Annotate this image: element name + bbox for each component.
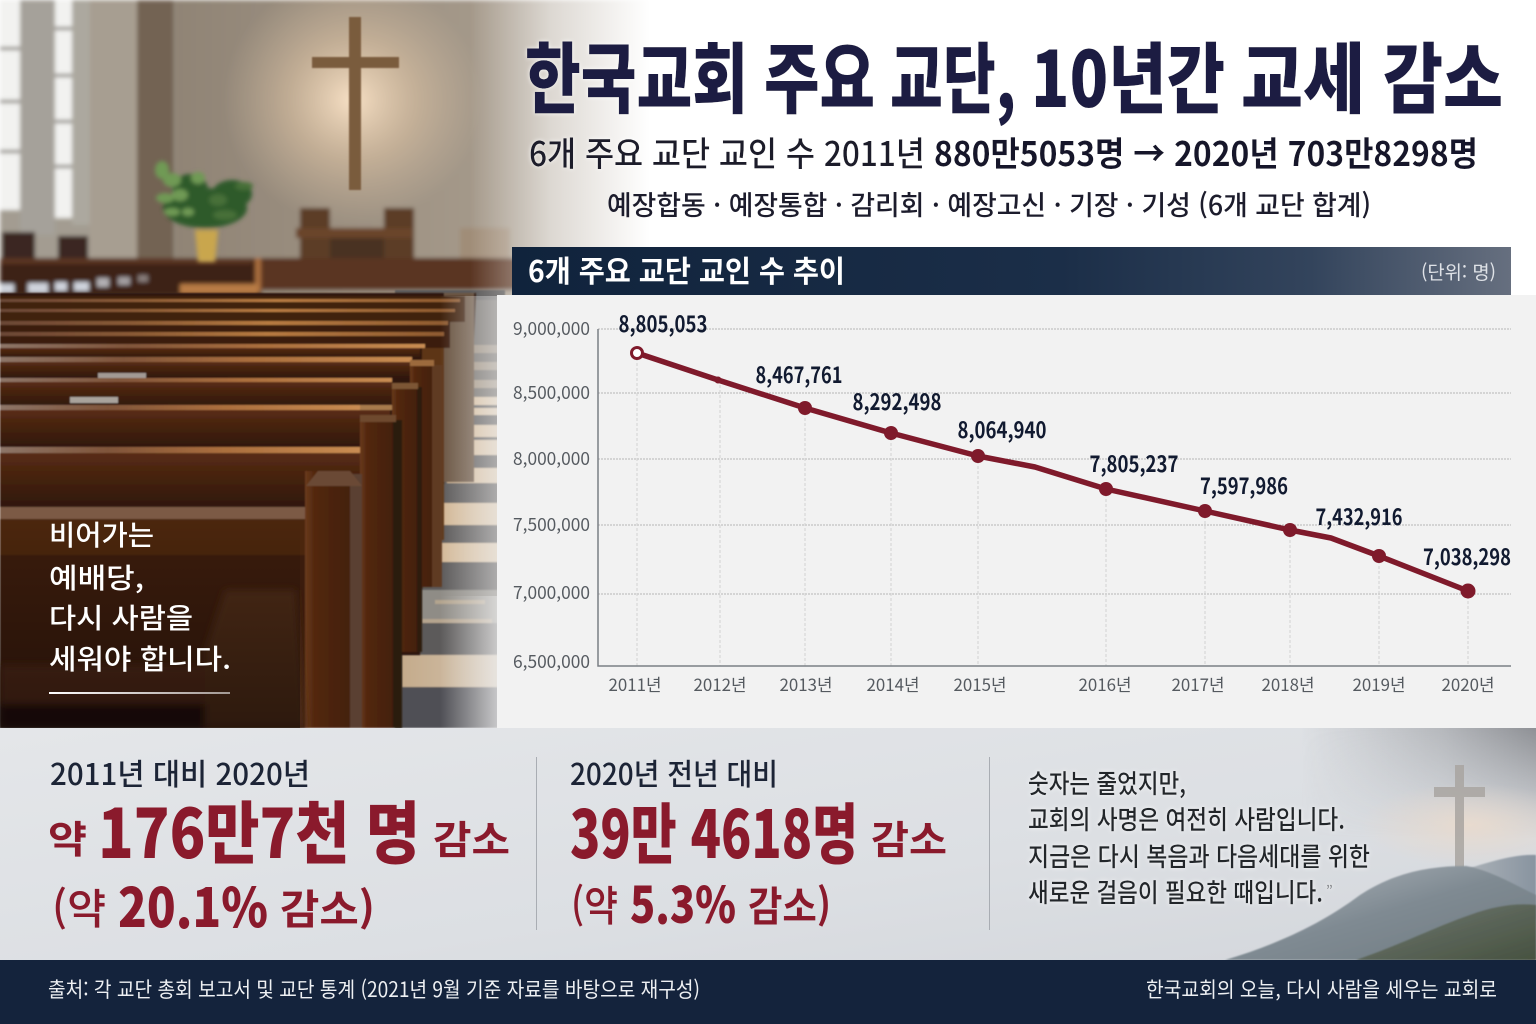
far rows — [0, 296, 465, 322]
books — [98, 373, 146, 378]
stat: 2011 vs 2020: 176만7천 명 — [98, 779, 420, 878]
stat: 2011 vs 2020: 감소) — [280, 876, 375, 936]
x axis labels: 2015년 — [954, 671, 1006, 696]
x axis labels: 2019년 — [1352, 671, 1406, 696]
row — [0, 357, 412, 362]
message text: 교회의 사명은 여전히 사람입니다. — [1028, 800, 1345, 837]
trend line — [637, 353, 1468, 591]
stat: 2011 vs 2020: 감소 — [433, 810, 510, 866]
x axis labels: 2020년 — [1442, 671, 1494, 696]
message text: 지금은 다시 복음과 다음세대를 위한 — [1028, 837, 1370, 874]
footer bar: 한국교회의 오늘, 다시 사람을 세우는 교회로 — [1146, 974, 1497, 1004]
y axis labels: 7,500,000 — [513, 511, 590, 537]
panel: line chart — [497, 247, 1536, 728]
data labels: 8,467,761 — [756, 358, 842, 390]
data labels: 7,805,237 — [1090, 447, 1178, 479]
message text: 숫자는 줄었지만, — [1028, 764, 1186, 801]
data labels: 8,292,498 — [852, 385, 942, 417]
x axis labels: 2013년 — [780, 671, 832, 696]
title: 한국교회 — [525, 19, 748, 130]
panel: bottom stats band — [0, 728, 1536, 960]
message text: 새로운 걸음이 필요한 때입니다. — [1028, 873, 1323, 910]
chart header bar: 6개 주요 교단 교인 수 추이 — [528, 247, 845, 291]
data labels: 8,064,940 — [958, 413, 1046, 445]
data labels: 7,038,298 — [1423, 540, 1511, 572]
floor with sun stripes — [395, 290, 512, 728]
title — [525, 19, 1503, 130]
pews — [0, 293, 476, 728]
y axis labels: 8,000,000 — [513, 445, 590, 471]
stat: 2020 vs previous year: 5.3% — [630, 866, 736, 938]
photo fade into white header — [470, 0, 650, 296]
stat: 2011 vs 2020 — [48, 750, 510, 943]
icon: hilltop cross — [1434, 765, 1485, 868]
photo caption: 비어가는 — [49, 514, 154, 554]
denominations list: 예장합동 · 예장통합 · 감리회 · 예장고신 · 기장 · 기성 (6개 교단 합계) — [607, 184, 1371, 223]
stat: 2020 vs previous year — [570, 750, 947, 938]
chairs — [2, 232, 35, 282]
y axis labels: 7,000,000 — [513, 579, 590, 605]
title: 교단, — [890, 19, 1016, 130]
altar — [300, 208, 330, 262]
y axis labels — [513, 315, 590, 674]
data labels: 8,805,053 — [618, 307, 708, 339]
photo caption: 예배당, — [49, 557, 144, 597]
subtitle: total change — [529, 127, 1478, 176]
data labels — [618, 307, 1511, 572]
x axis labels: 2018년 — [1262, 671, 1314, 696]
subtitle: total change: 880만5053명 → 2020년 703만8298명 — [934, 127, 1478, 176]
data markers — [632, 348, 1476, 598]
x axis labels: 2016년 — [1078, 671, 1132, 696]
icon: wall cross — [312, 17, 399, 190]
row — [0, 405, 360, 410]
title: 감소 — [1383, 19, 1503, 130]
message text: ” — [1326, 880, 1333, 899]
rail — [0, 258, 700, 290]
x axis labels: 2017년 — [1172, 671, 1224, 696]
far pew end posts — [444, 293, 474, 482]
data labels: 7,597,986 — [1200, 469, 1288, 501]
y axis labels: 8,500,000 — [513, 379, 590, 405]
row — [0, 447, 360, 453]
title: 교세 — [1241, 19, 1365, 130]
photo: church interior with pews — [0, 0, 700, 728]
stat: 2011 vs 2020: (약 — [52, 876, 106, 937]
x axis labels: 2012년 — [694, 671, 746, 696]
data labels: 7,432,916 — [1316, 500, 1403, 532]
title: 10년간 — [1031, 19, 1225, 130]
y axis labels: 6,500,000 — [513, 648, 590, 674]
foreground blurred pew — [0, 590, 306, 728]
photo caption: 다시 사람을 — [49, 597, 193, 637]
stat: 2011 vs 2020: 2011년 대비 2020년 — [50, 750, 310, 794]
title: 주요 — [764, 19, 875, 130]
chart header bar: (단위: 명) — [1421, 258, 1496, 285]
subtitle: total change: 6개 주요 교단 교인 수 2011년 — [529, 127, 925, 176]
x axis labels — [608, 671, 1494, 696]
stat: 2020 vs previous year: 2020년 전년 대비 — [570, 750, 778, 794]
light gaps — [0, 275, 148, 293]
window left — [0, 0, 72, 218]
stat: 2011 vs 2020: 약 — [48, 809, 87, 864]
stat: 2020 vs previous year: 감소) — [748, 873, 831, 933]
x axis labels: 2011년 — [608, 671, 662, 696]
photo caption — [49, 514, 231, 694]
y axis labels: 9,000,000 — [513, 315, 590, 341]
icon: plant in pot — [155, 161, 253, 262]
x axis labels: 2014년 — [866, 671, 920, 696]
stat: 2020 vs previous year: 감소 — [871, 810, 947, 866]
mountain scene with cross — [1225, 728, 1536, 960]
row — [0, 378, 392, 382]
stat: 2020 vs previous year: (약 — [571, 873, 618, 934]
footer bar — [0, 960, 1536, 1024]
message text — [1028, 764, 1370, 910]
divider — [989, 757, 990, 930]
stat: 2011 vs 2020: 20.1% — [118, 864, 268, 943]
photo caption: 세워야 합니다. — [49, 638, 231, 678]
footer bar: 출처: 각 교단 총회 보고서 및 교단 통계 (2021년 9월 기준 자료를 바탕으로 재구성) — [48, 974, 700, 1004]
stat: 2020 vs previous year: 39만 4618명 — [570, 782, 858, 878]
divider — [536, 757, 537, 930]
chart header bar — [512, 247, 1511, 295]
